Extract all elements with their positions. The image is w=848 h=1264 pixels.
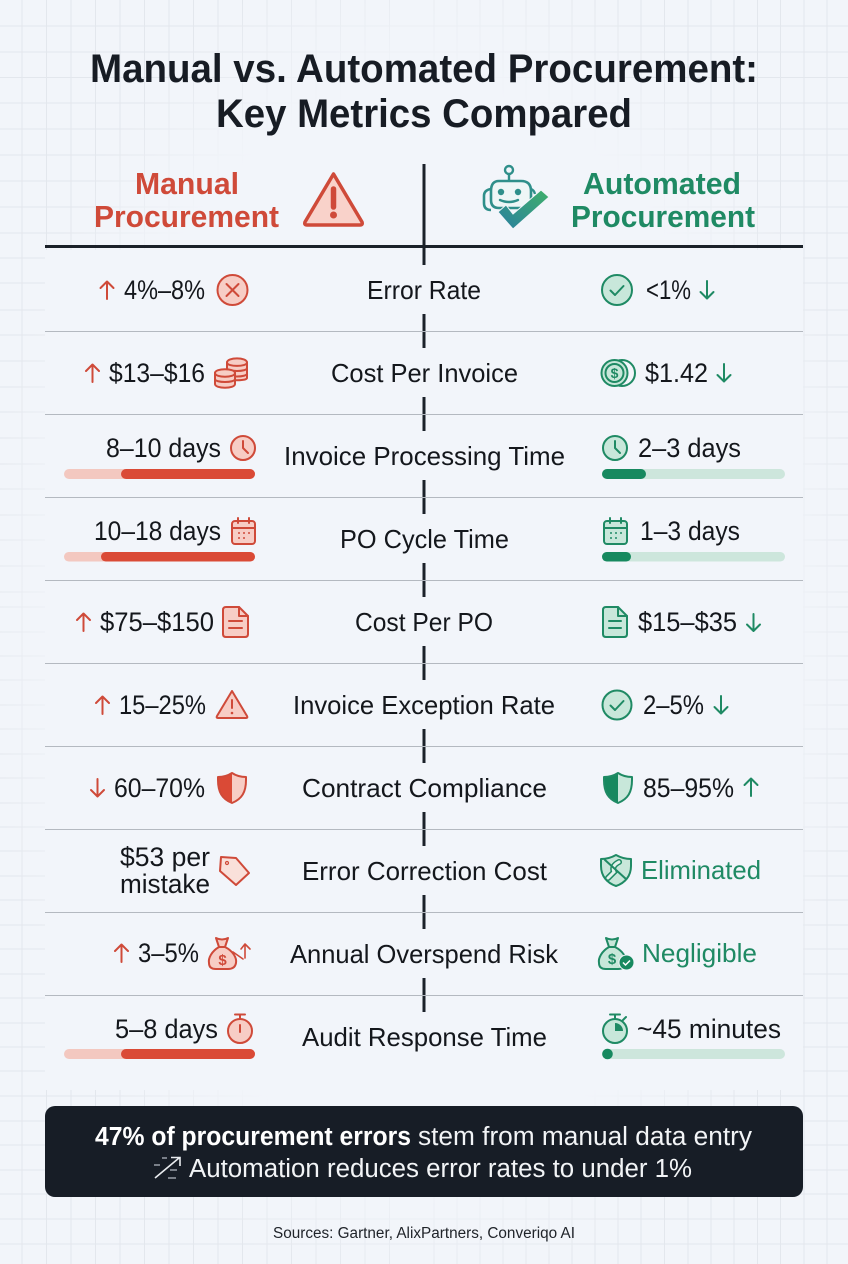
automated column heading: Procurement [571,200,755,234]
metric label: Error Correction Cost [302,856,548,886]
manual value: 5–8 days with bar: 5–8 days [115,1014,218,1044]
manual value: 3–5%: 3–5% [138,938,199,968]
title: Manual vs. Automated Procurement: [90,47,758,91]
row: Cost Per PO [77,607,760,637]
automated value: 2–3 days with bar [602,433,785,479]
manual value: 60–70% [91,773,246,803]
callout [45,1106,803,1197]
manual value: 4%–8%: 4%–8% [124,275,205,305]
manual value: 8–10 days with bar [64,433,255,479]
automated value: $1.42: $1.42 [645,358,708,388]
metric label: Error Rate [367,275,481,305]
manual value: 10–18 days with bar [64,516,255,562]
manual value: 4%–8% [100,275,248,305]
metric label: Invoice Processing Time [284,441,565,471]
automated value: Eliminated: Eliminated [641,855,761,885]
row: Contract Compliance [91,773,758,803]
manual value: 15–25% [96,690,247,720]
metric label: Cost Per Invoice [331,358,518,388]
automated value: ~45 minutes with bar: ~45 minutes [637,1014,781,1044]
manual value: 60–70%: 60–70% [114,773,205,803]
callout: Automation reduces error rates to under 1% [189,1155,692,1183]
automated value: 2–5% [602,690,728,720]
automated value: under 1%: <1% [646,275,691,305]
row: Invoice Processing Time [64,433,785,479]
callout: stem from manual data entry [418,1123,752,1151]
automated column heading: Automated [583,167,741,201]
manual value: 3–5%: $ [218,952,227,969]
automated value: Negligible: Negligible [642,938,757,968]
icon: robot with check mark [484,166,549,229]
automated value: $15–$35 [603,607,760,637]
row: Audit Response Time [64,1014,785,1059]
automated value: under 1% [602,275,714,305]
sources: Sources: Gartner, AlixPartners, Converiqo AI [273,1225,575,1242]
manual value: 5–8 days with bar [64,1014,255,1059]
manual value: $53 per mistake: mistake [120,869,210,899]
manual column heading: Manual [135,167,239,201]
manual value: 15–25%: 15–25% [119,690,206,720]
automated value: 2–5%: 2–5% [643,690,704,720]
automated value: 85–95%: 85–95% [643,773,734,803]
automated value: $15–$35: $15–$35 [638,607,737,637]
automated value: Negligible: $ [608,951,617,968]
row: Annual Overspend Risk [115,938,757,970]
row: Error Correction Cost [120,842,761,899]
automated value: 1–3 days with bar: 1–3 days [640,516,740,546]
automated value: $1.42: $ [611,365,619,381]
manual value: $13–$16 [86,358,247,388]
automated value: 1–3 days with bar [602,516,785,562]
metric label: PO Cycle Time [340,524,509,554]
metric label: Contract Compliance [302,773,547,803]
title: Key Metrics Compared [216,92,632,136]
manual value: 10–18 days with bar: 10–18 days [94,516,221,546]
automated value: 2–3 days with bar: 2–3 days [638,433,741,463]
manual column heading [94,167,362,234]
icon: warning triangle [305,174,362,225]
metric label: Audit Response Time [302,1022,547,1052]
row: Invoice Exception Rate [96,690,728,720]
manual value: $75–$150 [77,607,248,637]
manual value: 8–10 days with bar: 8–10 days [106,433,221,463]
manual value: $53 per mistake [120,842,249,899]
row: PO Cycle Time [64,516,785,562]
automated column heading [484,166,755,234]
icon: rising trend chart [154,1158,180,1178]
automated value: 85–95% [604,773,758,803]
title [90,47,758,136]
row: Cost Per Invoice [86,358,730,388]
metric label: Cost Per PO [355,607,493,637]
row: Error Rate [100,275,714,305]
manual value: 3–5% [115,938,250,969]
callout: 47% of procurement errors [95,1123,411,1151]
automated value: Negligible [599,938,757,970]
manual column heading: Procurement [94,200,279,234]
automated value: $1.42 [602,358,730,388]
manual value: $75–$150: $75–$150 [100,607,214,637]
manual value: $53 per mistake: $53 per [120,842,210,872]
automated value: ~45 minutes with bar [602,1014,785,1059]
metric label: Annual Overspend Risk [290,939,559,969]
manual value: $13–$16: $13–$16 [109,358,205,388]
metric label: Invoice Exception Rate [293,690,555,720]
